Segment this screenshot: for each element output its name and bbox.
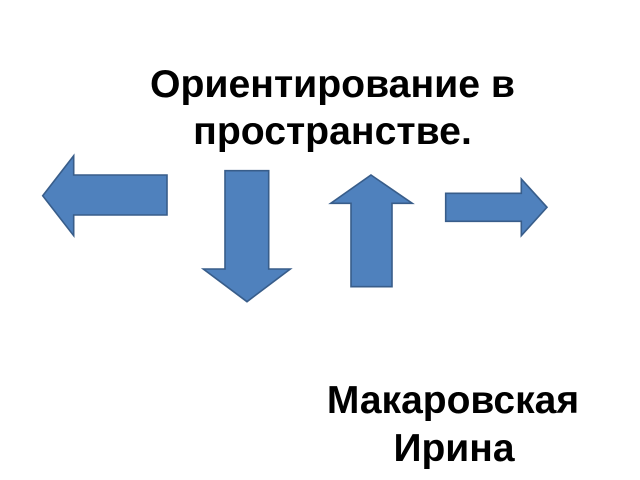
arrow: up <box>331 175 412 287</box>
title <box>150 63 515 153</box>
author name <box>327 379 579 470</box>
arrow: left <box>43 156 167 236</box>
arrow: right <box>446 179 547 236</box>
author name: Макаровская <box>327 379 579 422</box>
title: Ориентирование в <box>150 63 515 106</box>
title: пространстве. <box>193 110 472 153</box>
author name: Ирина <box>393 427 515 470</box>
arrow: down <box>203 171 290 302</box>
